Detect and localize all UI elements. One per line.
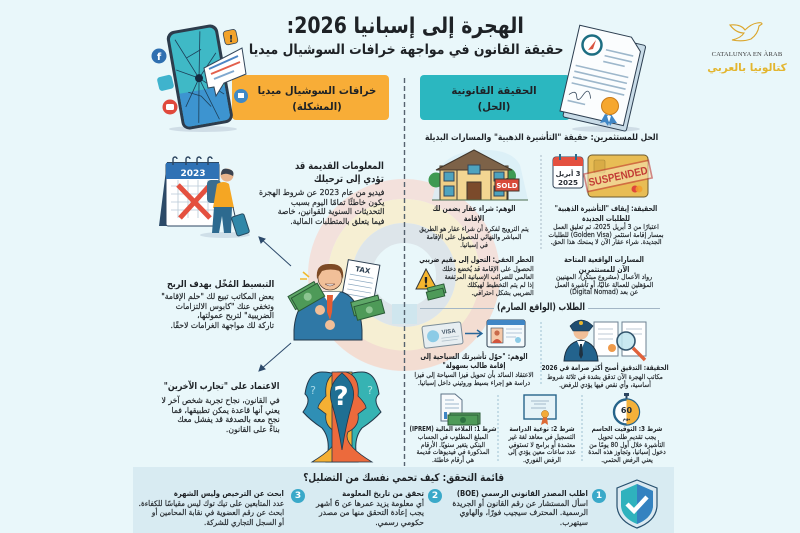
students heading text: الطلاب (الواقع الصارم) xyxy=(497,302,585,313)
block: suspended golden visa text xyxy=(548,204,664,246)
condition 3 body: يجب تقديم طلب تحويل xyxy=(598,433,656,441)
condition 1 heading: شرط 1: الملاءة المالية (IPREM) xyxy=(409,425,497,433)
student myth body: الاعتقاد السائد بأن تحويل فيزا السياحة إلى فيزا xyxy=(414,371,534,379)
step 3: أو السجل التجاري للشركة. xyxy=(204,518,284,526)
condition 3 body: يعني الرفض الحتمي. xyxy=(601,456,653,464)
condition 1 text xyxy=(408,424,498,465)
step 3 xyxy=(139,489,284,527)
icon: overlapping heads with question marks: ? xyxy=(310,384,316,397)
step 2: حكومي رسمي. xyxy=(375,518,424,526)
myth 3 body: بناءً على القانون. xyxy=(226,424,280,434)
arrow: to others' experiences xyxy=(258,342,292,372)
myth heading: الوهم: شراء عقار يضمن لك xyxy=(432,204,516,213)
myth 1 heading: تؤدي إلى ترحيلك xyxy=(314,174,384,184)
panel header: social media myths xyxy=(232,75,389,120)
myth 1 body: فيديو من عام 2023 عن شروط الهجرة xyxy=(259,187,384,197)
step 1 xyxy=(439,489,588,527)
paths body: عن بعد (Digital Nomad) xyxy=(570,288,638,296)
myth 3 body: نجح معه بالصدفة قد يفشل معك xyxy=(178,414,280,424)
condition 1 body: هي أرقام خاطئة. xyxy=(432,456,474,464)
paths heading xyxy=(564,255,644,274)
title: الهجرة إلى إسبانيا 2026: xyxy=(287,14,524,39)
block: realistic investor paths xyxy=(555,255,653,296)
condition 2 body xyxy=(454,434,630,465)
fact body: اعتبارًا من 3 أبريل 2025، تم تعليق العمل xyxy=(553,223,659,231)
paths heading: الآن للمستثمرين xyxy=(579,264,629,274)
myth 1 heading: المعلومات القديمة قد xyxy=(295,161,384,172)
icon: warning sign with money: ! xyxy=(423,276,429,291)
audit body xyxy=(517,374,693,390)
block: student visa myth text xyxy=(414,351,534,387)
students divider xyxy=(540,322,542,384)
audit heading: الحقيقة: التدقيق أصبح أكثر صرامة في 2026 xyxy=(541,363,669,372)
condition 3 body: التأشيرة خلال أول 80 يومًا من xyxy=(589,441,665,449)
myth 1 heading xyxy=(295,161,384,185)
badge 2 xyxy=(428,489,442,503)
icon: shield check xyxy=(616,479,658,529)
arrow: to outdated info xyxy=(258,236,292,266)
badge 3: 3 xyxy=(295,491,301,501)
step 1: الرسمية. المحترف سيجيب فورًا، والهاوي xyxy=(460,508,588,517)
header text: myths: خرافات السوشيال ميديا xyxy=(258,85,376,97)
myth 2 text xyxy=(161,279,274,330)
student myth heading: إقامة طالب بسهولة" xyxy=(442,361,506,370)
condition 2 text xyxy=(500,424,584,465)
condition 3 body: دخول إسبانيا، وتجاوز هذه المدة xyxy=(588,448,666,456)
fact heading: الحقيقة: إيقاف "التأشيرة الذهبية" xyxy=(555,204,657,213)
icon: cracked phone with social icons xyxy=(152,24,248,132)
icon: stopwatch 60 days xyxy=(610,392,644,428)
condition 3 body xyxy=(539,434,715,465)
rule right xyxy=(588,308,660,309)
myth 2 body: تاركة لك مواجهة الغرامات لاحقًا. xyxy=(171,320,274,330)
icon: cracked phone with social icons: ! xyxy=(229,34,233,45)
myth body: في إسبانيا. xyxy=(460,241,488,249)
header text: truth xyxy=(451,85,537,113)
myth 2 body xyxy=(161,291,274,330)
badge 2: 2 xyxy=(432,491,438,501)
icon: visa to student id: VISA xyxy=(441,328,457,336)
icon: immigration officer with documents and magnifier xyxy=(564,320,646,362)
risk body: الضريبي بشكل احترافي. xyxy=(472,289,534,297)
panel header: legal truth xyxy=(420,75,570,120)
icon: businessman with money and tax papers xyxy=(287,259,386,340)
badge 3 xyxy=(291,489,305,503)
condition 3 text xyxy=(584,424,670,465)
myth 1 text xyxy=(259,161,384,226)
logo text latin: CATALUNYA EN ÀRAB xyxy=(712,51,782,58)
icon: calendar 3 April 2025: 3 أبريل xyxy=(556,169,581,178)
condition 1 body xyxy=(365,434,541,465)
icon: overlapping heads with question marks: ? xyxy=(333,382,349,412)
step 2: تحقق من تاريخ المعلومة xyxy=(342,489,424,498)
condition 3 heading: شرط 3: التوقيت الحاسم xyxy=(592,425,662,433)
myth 3 body xyxy=(162,395,280,434)
risk body xyxy=(442,265,534,297)
condition 2 heading: شرط 2: نوعية الدراسة xyxy=(509,425,575,433)
icon: bank document and money xyxy=(440,393,482,427)
myth 2 heading: التبسيط المُخّل بهدف الربح xyxy=(167,279,274,290)
myth 3 heading: الاعتماد على "تجارب الآخرين" xyxy=(164,381,280,392)
block: hidden tax risk text xyxy=(419,255,534,297)
fact body: بمسار إقامة استثمر (Golden Visa) للطلبات xyxy=(548,231,664,239)
icon: legal document with seal xyxy=(559,24,646,132)
icon: house sold: SOLD xyxy=(496,182,518,190)
myth 2 body: الضريبية" لتربح عمولتها، xyxy=(197,310,274,320)
myth 1 body: فيما يتعلق بالمتطلبات المالية. xyxy=(290,216,384,226)
student myth heading xyxy=(395,352,553,371)
header text: truth: الحقيقة القانونية xyxy=(451,85,537,97)
myth heading xyxy=(432,204,516,223)
icon: overlapping heads with question marks: ? xyxy=(367,384,373,397)
header text: truth: (الحل) xyxy=(478,101,510,113)
myth 1 body: التحديثات السنوية للقوانين، خاصة xyxy=(277,206,384,216)
condition 1 body: المبلغ المطلوب في الحساب xyxy=(418,433,488,441)
step 1: اطلب المصدر القانوني الرسمي (BOE) xyxy=(457,489,588,498)
icon: suspended golden card: SUSPENDED xyxy=(588,165,649,189)
rule left xyxy=(420,308,494,309)
badge 1: 1 xyxy=(596,491,602,501)
icon: calendar 3 April 2025 xyxy=(552,154,584,188)
icon: house sold xyxy=(428,149,528,200)
icon: overlapping heads with question marks xyxy=(302,372,382,462)
condition 2 body: عدد ساعات معين يؤدي إلى xyxy=(508,448,576,456)
myth 2 body: بعض المكاتب تبيع لك "حلم الإقامة" xyxy=(161,291,274,301)
investors column divider xyxy=(540,155,542,249)
checklist heading: قائمة التحقق: كيف تحمي نفسك من التضليل؟ xyxy=(303,472,504,484)
myth 3 body: في القانون، نجاح تجربة شخص آخر لا xyxy=(162,395,280,405)
myth body: المباشر والنهائي للحصول على الإقامة xyxy=(426,233,521,241)
icon: calendar 3 April 2025: 2025 xyxy=(558,178,578,187)
icon: bird logo xyxy=(729,22,763,42)
myth 1 body: يكون خاطئًا تمامًا اليوم بسبب xyxy=(290,197,384,207)
myth 2 body: وتخفي عنك "كابوس الالتزامات xyxy=(176,301,274,311)
condition 2 body: الرفض الفوري. xyxy=(523,456,561,464)
fact body: الجديدة. شراء عقار الآن لا يمنحك هذا الحق. xyxy=(550,238,662,246)
condition column dividers xyxy=(497,395,584,461)
student myth body xyxy=(384,372,564,387)
student myth body: دراسة هو إجراء بسيط وروتيني داخل إسبانيا. xyxy=(418,379,530,387)
step 3: ابحث عن رقم العضوية في نقابة المحامين أو xyxy=(152,508,284,517)
investors heading: الحل للمستثمرين: حقيقة "التأشيرة الذهبية" والمسارات البديلة xyxy=(425,133,658,143)
fact body xyxy=(548,222,664,246)
myth body: يتم الترويج لفكرة أن شراء عقار هو الطريق xyxy=(419,225,529,233)
logo xyxy=(707,22,787,74)
icon: visa to student id xyxy=(422,320,526,349)
icon: calendar 2023 with traveler xyxy=(159,156,250,238)
risk body: إذا لم يتم التخطيط لهيكلك xyxy=(467,281,534,289)
fact heading xyxy=(555,204,657,222)
step 1: سيتهرب. xyxy=(560,518,588,526)
paths body: المؤهلين للعمالة عاليًا، أو تأشيرة العمل xyxy=(555,281,653,289)
paths heading: المسارات الواقعية المتاحة xyxy=(564,255,644,264)
myth 3 text xyxy=(162,380,280,434)
block: audit fact text xyxy=(543,362,667,390)
icon: businessman with money and tax papers: TAX xyxy=(355,265,371,276)
fact heading: للطلبات الجديدة xyxy=(582,214,630,222)
condition 1 body: البنكي يتغير سنويًا. الأرقام xyxy=(421,441,485,449)
icon: calendar 2023 with traveler: 2023 xyxy=(180,169,206,179)
audit body: مكاتب الهجرة الآن تدقق بشدة في ثلاثة شروط xyxy=(547,373,663,381)
panel: checklist xyxy=(133,467,674,533)
step 1: اسأل المستشار عن رقم القانون أو الجريدة xyxy=(452,498,588,508)
icon: suspended golden card xyxy=(583,154,653,198)
student myth heading: الوهم: "حوّل تأشيرتك السياحية إلى xyxy=(420,352,528,361)
header text: myths xyxy=(258,85,376,113)
step 2: يجب إعادة التحقق منها من مصدر xyxy=(319,508,424,517)
central dashed divider xyxy=(404,78,406,466)
logo text arabic: كتالونيا بالعربي xyxy=(707,62,787,74)
step 3: عدد المتابعين على تيك توك ليس مقياسًا للكفاءة. xyxy=(139,498,284,508)
block: property myth text xyxy=(419,204,529,249)
subtitle: حقيقة القانون في مواجهة خرافات السوشيال ميديا xyxy=(248,42,563,58)
audit body: أساسية، وأي نقص فيها يؤدي للرفض. xyxy=(559,381,651,389)
risk heading: الخطر الخفي: التحول إلى مقيم ضريبي xyxy=(419,255,534,264)
paths body xyxy=(555,272,653,296)
badge 1 xyxy=(592,489,606,503)
condition 2 body: معتمدة أو برامج لا تستوفي xyxy=(509,441,575,449)
paths body: رواد الأعمال (مشروع مبتكر)، المهنيين xyxy=(556,273,652,281)
myth heading: الإقامة xyxy=(464,214,484,222)
step 3: ابحث عن الترخيص وليس الشهرة xyxy=(174,489,284,498)
icon: stopwatch 60 days: 60 xyxy=(621,406,632,415)
myth 1 body xyxy=(259,187,384,226)
icon: school certificate xyxy=(522,393,558,427)
condition 1 body: المذكورة في فيديوهات قديمة xyxy=(416,448,490,456)
icon: warning sign with money xyxy=(415,268,446,301)
risk body: العالمي للضرائب الإسبانية المرتفعة xyxy=(445,273,534,281)
risk body: الحصول على الإقامة قد يُخضع دخلك xyxy=(443,265,534,273)
step 2: أي معلومة يزيد عمرها عن 6 أشهر xyxy=(316,498,424,508)
myth body xyxy=(419,224,529,249)
step 2 xyxy=(316,489,424,527)
header text: myths: (المشكلة) xyxy=(292,101,342,113)
myth 3 body: يعني أنها قاعدة يمكن تطبيقها، فما xyxy=(172,405,280,415)
icon: cracked phone with social icons: f xyxy=(157,52,162,63)
condition 2 body: التسجيل في معاهد لغة غير xyxy=(509,433,575,441)
icon: stopwatch 60 days: يوم xyxy=(623,417,631,422)
